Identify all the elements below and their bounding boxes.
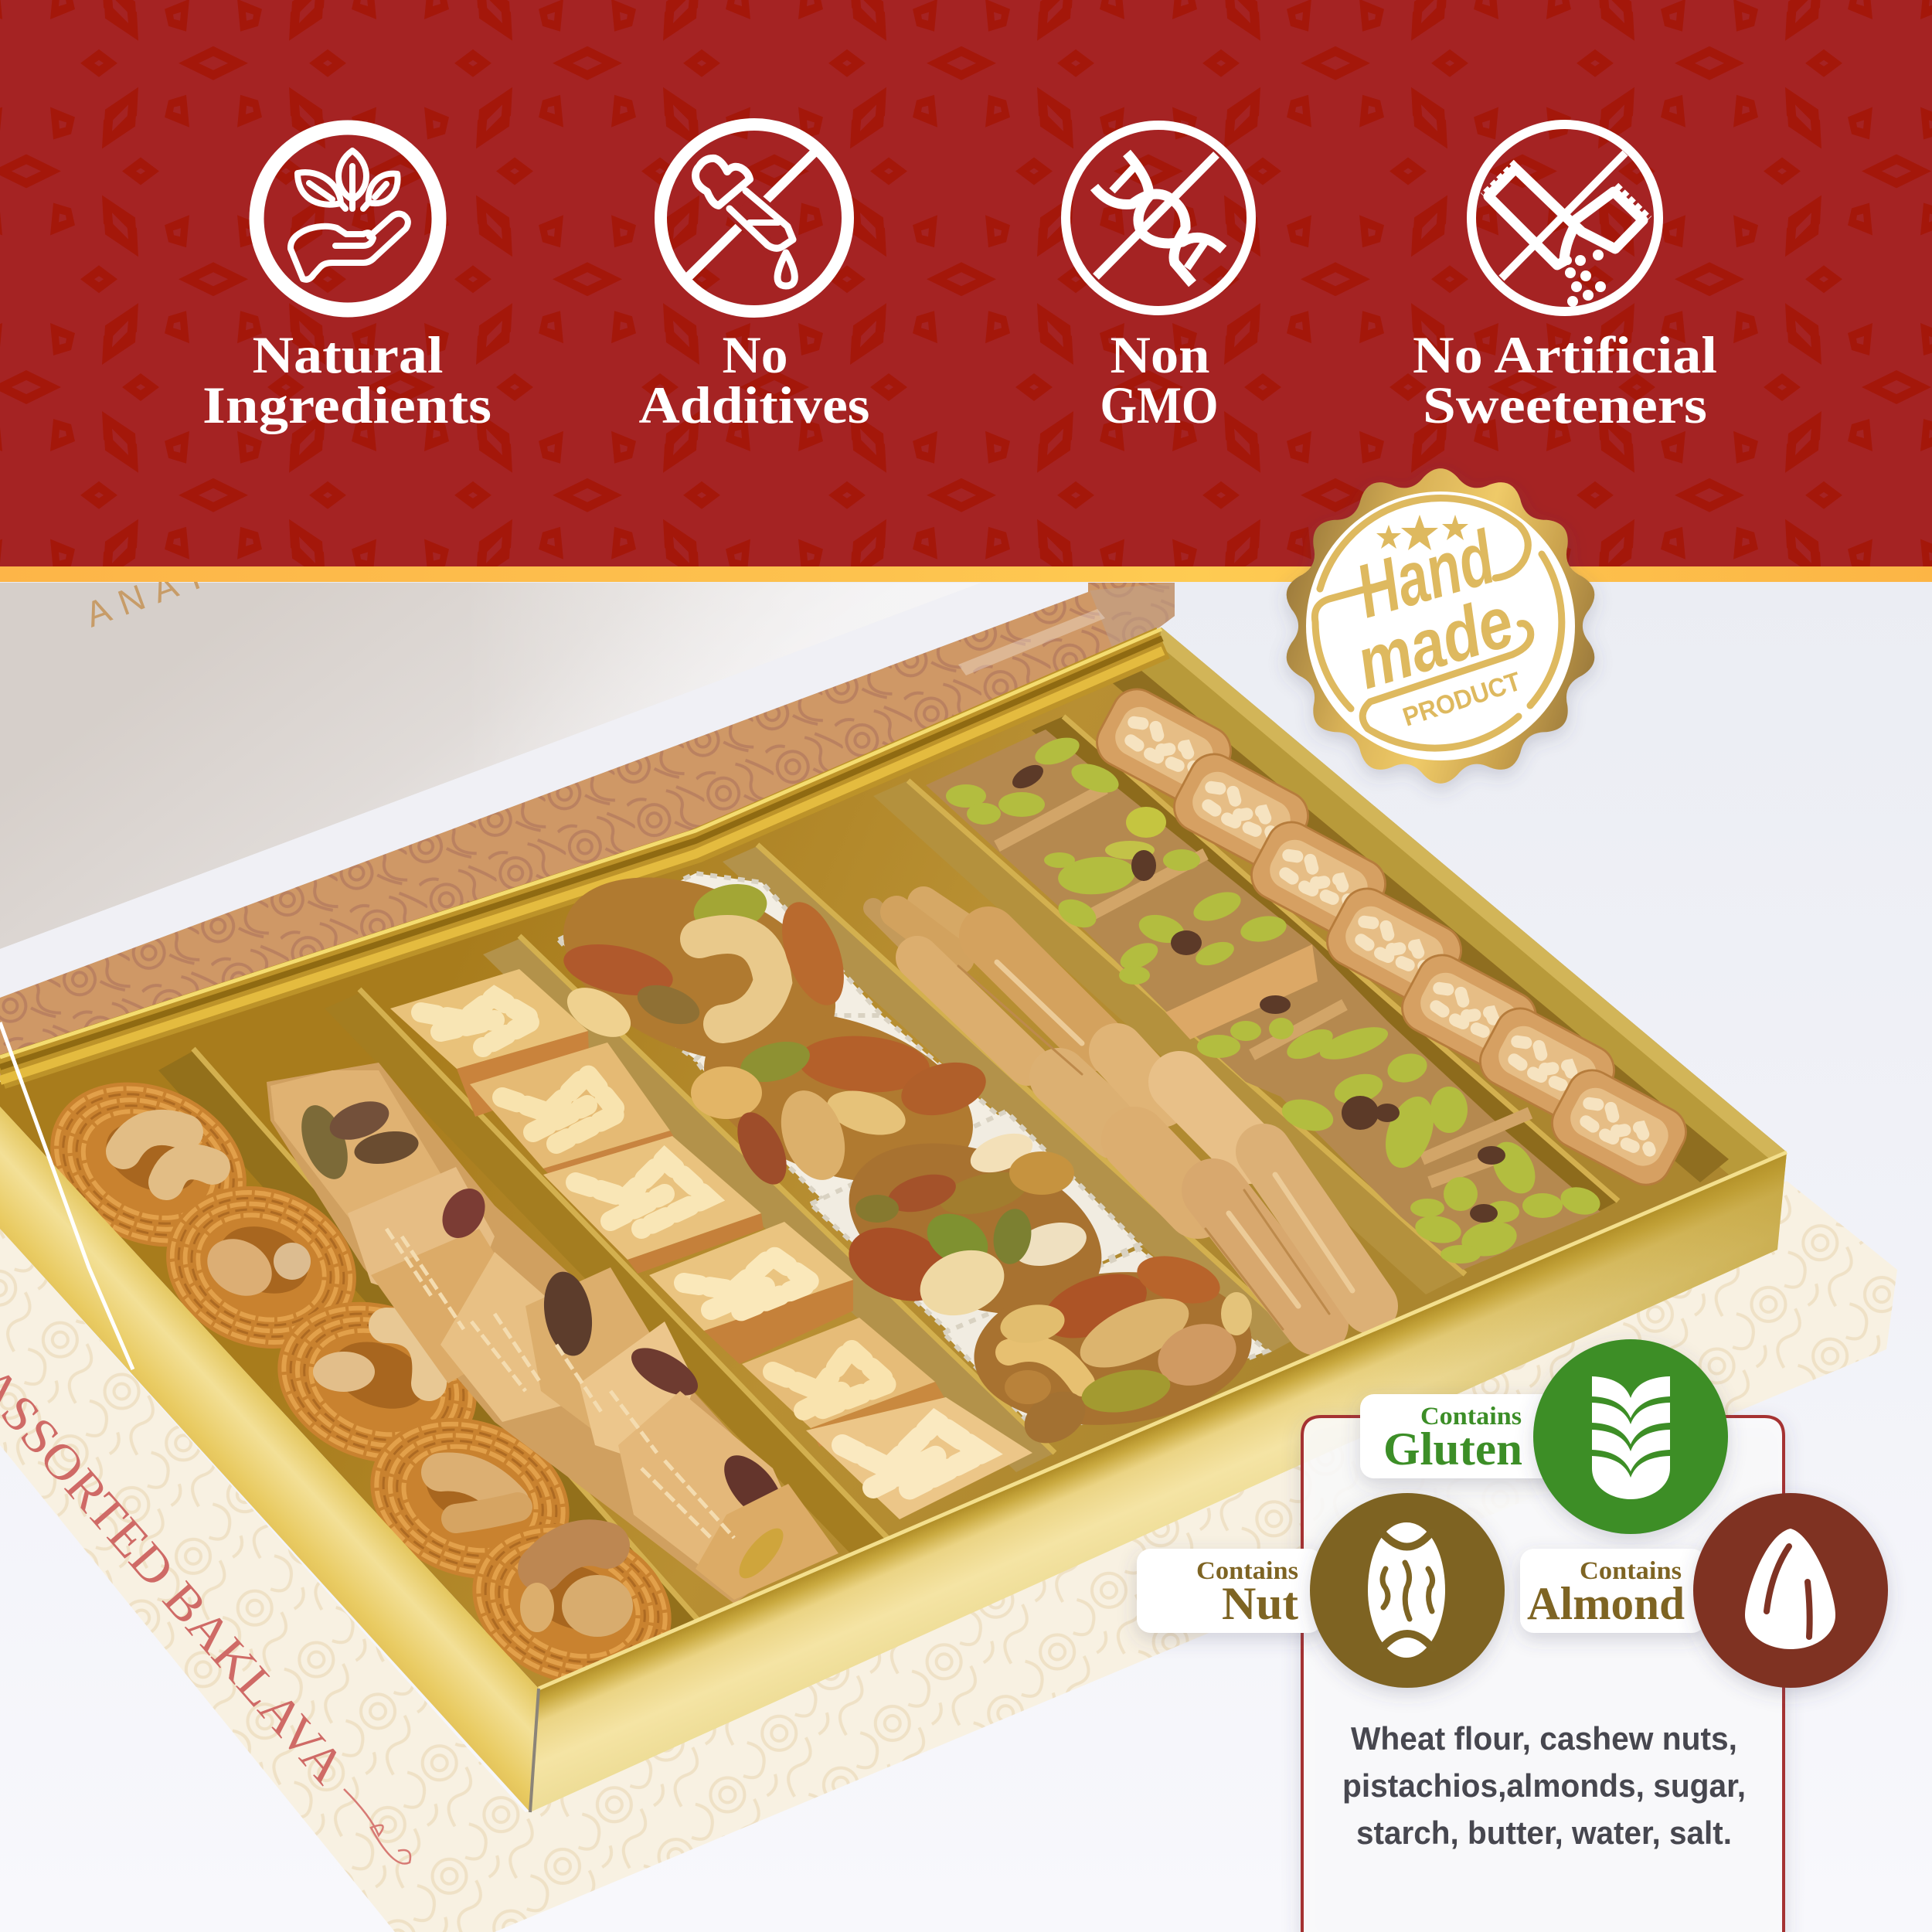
card background [1302, 1417, 1784, 1932]
icon: leaves in hand [257, 128, 439, 310]
lid brand lettering: ANAT [80, 551, 221, 634]
tray interior base [0, 628, 1787, 1689]
compartment 6: pistachio baklava [926, 730, 1604, 1270]
nut circle [1310, 1493, 1505, 1688]
badge text: hand: Hand [1347, 514, 1504, 634]
compartment 4: glazed nuts in paper cups [536, 841, 1267, 1454]
white lid edge strip [0, 583, 1088, 998]
badge swoosh ring lines [1315, 498, 1562, 748]
label: non gmo: Non [1110, 325, 1210, 384]
ingredients text: starch, butter, water, salt. [1356, 1815, 1732, 1851]
gluten chip [1360, 1394, 1561, 1478]
badge text: product: PRODUCT [1400, 667, 1525, 733]
gold tray front-right wall [530, 1152, 1787, 1812]
nut label: Contains [1196, 1557, 1298, 1585]
compartment 7: cashew rolls [1088, 681, 1695, 1193]
icon: almond [1745, 1529, 1835, 1649]
photo background [0, 580, 1932, 1932]
allergen: gluten [1360, 1339, 1728, 1534]
icon: wheat [1592, 1376, 1670, 1499]
badge stars [1376, 515, 1468, 550]
icon: crossed sachets [1471, 124, 1658, 311]
gluten circle [1533, 1339, 1728, 1534]
box base with cream pattern [0, 1181, 1897, 1932]
label: no artificial sweeteners: No Artificial [1413, 325, 1717, 384]
nut chip [1137, 1549, 1322, 1633]
almond label: Almond [1527, 1578, 1685, 1629]
nut label: Nut [1222, 1578, 1298, 1629]
gold stripe [0, 566, 1932, 582]
gluten label: Gluten [1383, 1423, 1522, 1475]
label: no additives: Additives [638, 376, 870, 434]
label: natural ingredients: Natural [252, 325, 444, 384]
label: no additives: No [722, 325, 788, 384]
feature: natural ingredients [202, 128, 492, 434]
box side flourish [344, 1789, 410, 1864]
gluten label: Contains [1420, 1403, 1522, 1430]
ribbon string [0, 1022, 133, 1369]
ingredients text: pistachios,almonds, sugar, [1342, 1767, 1746, 1804]
badge scalloped gold seal [1287, 468, 1594, 784]
top gold rim [0, 629, 1163, 1080]
almond chip [1520, 1549, 1706, 1633]
label: natural ingredients: Ingredients [202, 376, 492, 434]
icon: crossed dna helix [1066, 125, 1251, 311]
badge text: made: made [1347, 580, 1522, 704]
allergen: nut [1137, 1493, 1505, 1688]
ingredients text: Wheat flour, cashew nuts, [1351, 1720, 1737, 1757]
icon: nut [1368, 1522, 1445, 1658]
box lid interior [0, 583, 981, 949]
label: no artificial sweeteners: Sweeteners [1423, 376, 1707, 434]
feature: no additives [638, 124, 870, 434]
almond label: Contains [1580, 1557, 1682, 1585]
icon: crossed dropper [661, 124, 848, 311]
almond circle [1693, 1493, 1888, 1688]
feature: no artificial sweeteners [1413, 124, 1717, 434]
copper patterned lid rim [0, 583, 1175, 1078]
red header band [0, 0, 1932, 567]
badge: hand made product [1287, 468, 1594, 784]
tray right wall [1109, 628, 1787, 1182]
compartment 3: nut slab blocks [390, 969, 1032, 1519]
feature: non gmo [1066, 125, 1251, 434]
panel: ingredients card [1302, 1417, 1784, 1932]
label: non gmo: GMO [1100, 376, 1218, 434]
gold tray front-left wall [0, 1107, 539, 1812]
badge white disc [1306, 492, 1575, 760]
compartment 2: shredded triangle pastries [267, 1063, 838, 1604]
compartment 1: cashew nests [23, 1052, 694, 1712]
compartment dividers [158, 716, 1618, 1662]
compartment 5: rolled cigar pastries [873, 903, 1370, 1329]
allergen: almond [1520, 1493, 1888, 1688]
